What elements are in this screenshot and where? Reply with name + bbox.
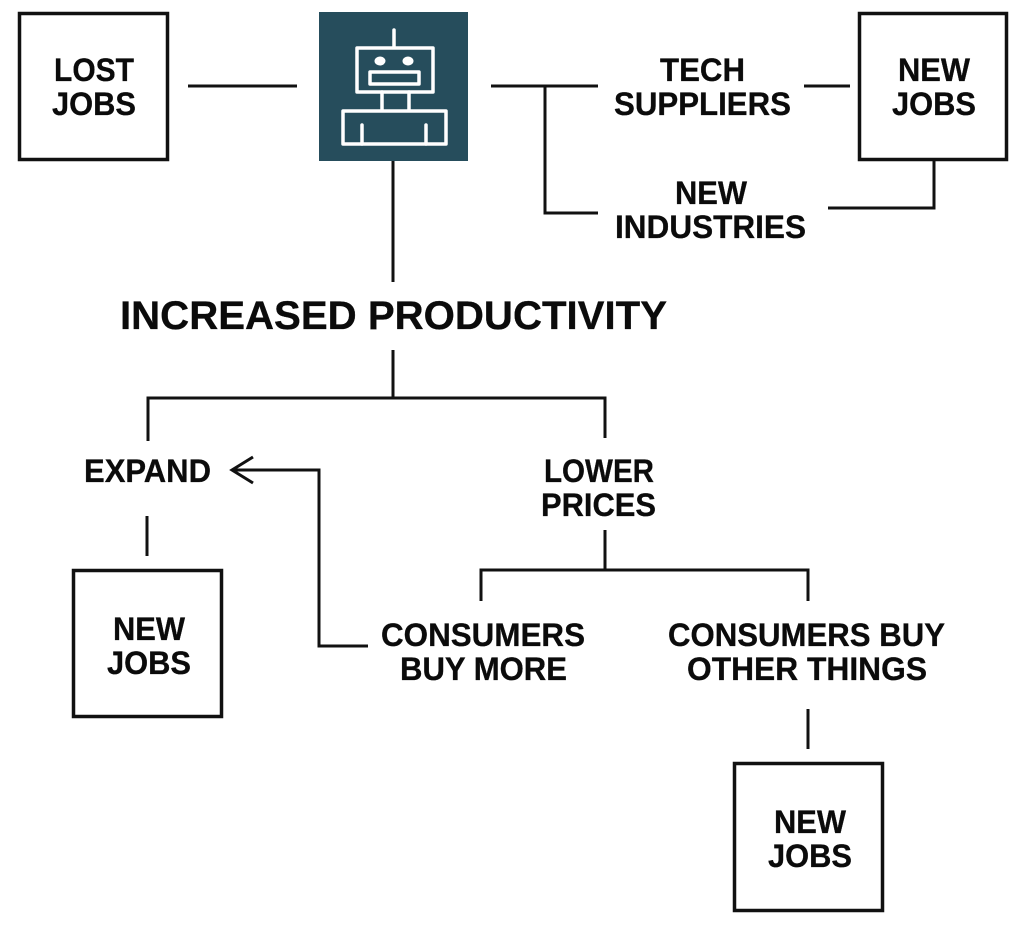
box: new jobs bottom: JOBS xyxy=(768,838,852,874)
box: new jobs top right: NEW xyxy=(898,52,971,88)
label: lower prices: PRICES xyxy=(541,487,656,523)
box: new jobs left: JOBS xyxy=(107,645,191,681)
box: new jobs top right: JOBS xyxy=(892,86,976,122)
label: new industries: NEW xyxy=(675,175,748,211)
label: consumers buy other things: OTHER THINGS xyxy=(687,651,927,687)
label: consumers buy other things xyxy=(668,617,945,687)
label: lower prices: LOWER xyxy=(544,453,654,489)
connector: other things to new jobs xyxy=(806,709,810,749)
label: new industries xyxy=(615,175,806,245)
label: new industries: INDUSTRIES xyxy=(615,209,806,245)
connector: tech suppliers to new jobs xyxy=(804,84,850,88)
connector: lost jobs to robot xyxy=(188,84,297,88)
heading: increased productivity: INCREASED PRODUCTIVITY xyxy=(120,294,667,338)
label: consumers buy more xyxy=(381,617,585,687)
label: tech suppliers: TECH xyxy=(660,52,745,88)
connector: robot to tech suppliers and new industries xyxy=(491,86,598,213)
label: consumers buy more: CONSUMERS xyxy=(381,617,585,653)
box: lost jobs: JOBS xyxy=(52,86,136,122)
connector: lower prices branches xyxy=(481,530,808,601)
box: new jobs left: NEW xyxy=(113,611,186,647)
arrow: consumers buy more to expand xyxy=(232,457,368,646)
label: tech suppliers: SUPPLIERS xyxy=(614,86,791,122)
label: lower prices xyxy=(541,453,656,523)
box: new jobs bottom: NEW xyxy=(774,804,847,840)
icon: robot xyxy=(319,12,468,161)
connector: expand to new jobs xyxy=(146,516,148,556)
label: consumers buy other things: CONSUMERS BUY xyxy=(668,617,945,653)
box: lost jobs: LOST xyxy=(54,52,134,88)
box: lost jobs xyxy=(20,14,168,160)
connector: productivity branches xyxy=(148,350,605,441)
label: tech suppliers xyxy=(614,52,791,122)
label: expand: EXPAND xyxy=(84,453,211,489)
box: new jobs bottom xyxy=(734,764,882,910)
box: new jobs left xyxy=(74,570,222,716)
connector: robot to increased productivity xyxy=(392,161,394,282)
connector: new industries to new jobs xyxy=(828,160,934,208)
label: consumers buy more: BUY MORE xyxy=(400,651,567,687)
box: new jobs top right xyxy=(860,14,1006,160)
